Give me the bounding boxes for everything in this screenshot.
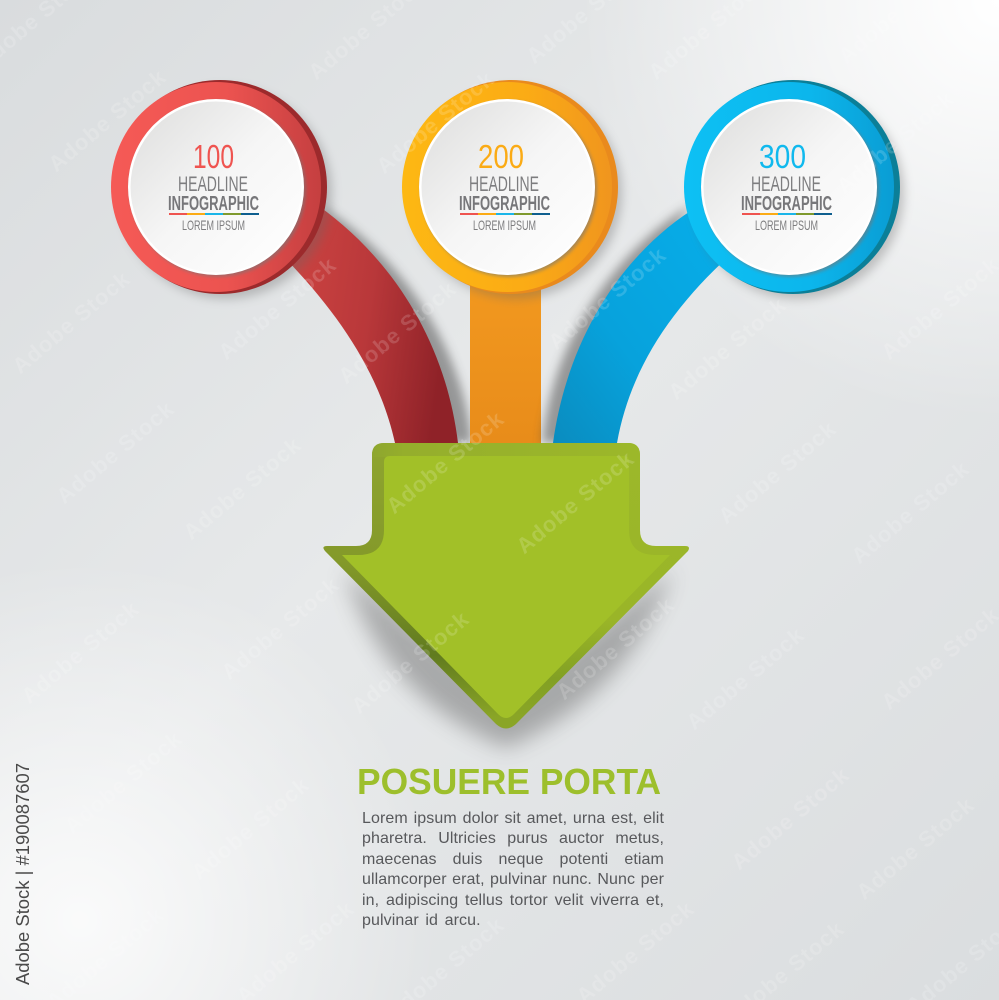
circle: 100: 100 xyxy=(193,138,234,175)
connector: blue ribbon xyxy=(542,205,730,443)
watermark pattern: Adobe Stock xyxy=(7,266,135,379)
watermark pattern: Adobe Stock xyxy=(831,86,959,199)
watermark pattern: Adobe Stock xyxy=(511,446,639,559)
watermark pattern: Adobe Stock xyxy=(381,406,509,519)
body text: pulvinar id arcu. xyxy=(362,912,481,929)
watermark pattern: Adobe Stock xyxy=(726,762,854,875)
watermark pattern: Adobe Stock xyxy=(16,596,144,709)
watermark pattern: Adobe Stock xyxy=(333,276,461,389)
circle: 200 xyxy=(402,80,622,299)
circle: 100 xyxy=(111,80,332,299)
circle: 200: INFOGRAPHIC xyxy=(459,193,550,215)
watermark pattern: Adobe Stock xyxy=(59,726,187,839)
watermark pattern: Adobe Stock xyxy=(51,396,179,509)
body text xyxy=(362,810,664,929)
watermark pattern: Adobe Stock xyxy=(551,592,679,705)
circle: 300 xyxy=(684,80,904,299)
watermark pattern: Adobe Stock xyxy=(681,622,809,735)
title: POSUERE PORTA xyxy=(357,761,661,802)
connector: orange ribbon xyxy=(470,285,541,443)
body text: pharetra. Ultricies purus auctor metus, xyxy=(362,830,664,847)
watermark pattern: Adobe Stock xyxy=(346,606,474,719)
body text: in, adipiscing tellus tortor velit viverra et, xyxy=(362,892,664,909)
watermark pattern: Adobe Stock xyxy=(178,432,306,545)
circle: 300: LOREM IPSUM xyxy=(755,217,818,233)
watermark pattern: Adobe Stock xyxy=(663,292,791,405)
connector: red ribbon xyxy=(285,200,472,443)
circle: 200: 200 xyxy=(478,138,524,175)
stock id label: Adobe Stock | #190087607 xyxy=(13,763,33,985)
watermark pattern: Adobe Stock xyxy=(851,792,979,905)
watermark pattern: Adobe Stock xyxy=(186,772,314,885)
circle: 100: LOREM IPSUM xyxy=(182,217,245,233)
watermark pattern: Adobe Stock xyxy=(713,416,841,529)
watermark pattern: Adobe Stock xyxy=(213,252,341,365)
arrow xyxy=(320,443,696,748)
circle: 300: 300 xyxy=(759,138,806,175)
circle: 300: HEADLINE xyxy=(751,173,821,196)
circle: 200: HEADLINE xyxy=(469,173,539,196)
circle: 200: LOREM IPSUM xyxy=(473,217,536,233)
watermark pattern: Adobe Stock xyxy=(543,242,671,355)
watermark pattern: Adobe Stock xyxy=(43,64,171,177)
circle: 100: INFOGRAPHIC xyxy=(168,193,259,215)
circle: 100: HEADLINE xyxy=(178,173,248,196)
body text: Lorem ipsum dolor sit amet, urna est, elit xyxy=(362,810,664,827)
body text: ullamcorper erat, pulvinar nunc. Nunc per xyxy=(362,871,664,888)
body text: maecenas duis neque potenti etiam xyxy=(362,851,664,868)
circle: 300: INFOGRAPHIC xyxy=(741,193,832,215)
watermark pattern: Adobe Stock xyxy=(216,572,344,685)
watermark pattern: Adobe Stock xyxy=(846,456,974,569)
watermark pattern: Adobe Stock xyxy=(371,66,499,179)
